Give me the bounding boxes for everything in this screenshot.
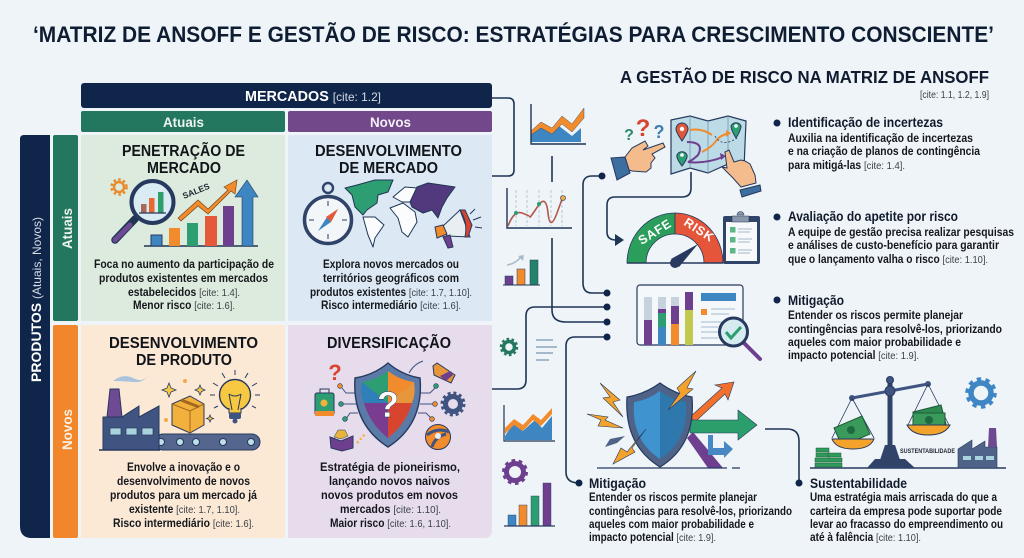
text: desenvolvimento de mercado description [310,259,472,312]
icon: purple gear [504,460,526,484]
connector lines [492,98,799,483]
item: sustentabilidade: carteira da empresa pode suportar pode [810,506,1002,518]
illustration: hands over map: ? [636,115,650,142]
illustration: balance scale [810,376,1006,468]
text: desenvolvimento de produto description: produtos para um mercado já [110,490,258,502]
panel: desenvolvimento de produto [81,325,285,538]
illustration: risk gauge and checklist: SAFE [636,216,674,248]
text: penetração de mercado description: Menor risco [cite: 1.6]. [133,300,235,312]
icon: area chart bottom [504,405,555,441]
text: penetração de mercado description: estabelecidos [cite: 1.4]. [128,287,240,299]
illustration: hands over map: ? [624,127,634,144]
panel: desenvolvimento de mercado [288,135,492,321]
text: desenvolvimento de mercado description: territórios geográficos com [323,273,459,285]
heading: desenvolvimento de produto [109,335,258,369]
icon: area chart top [531,104,586,144]
title: ‘MATRIZ DE ANSOFF E GESTÃO DE RISCO: ESTRATÉGIAS PARA CRESCIMENTO CONSCIENTE’ [33,22,994,47]
item: avaliação do apetite por risco: e análises de custo-benefício para garantir [788,240,999,252]
item: mitigação right: Entender os riscos permite planejar [788,310,963,322]
item: mitigação right [774,292,1002,362]
side header: novos row: Novos [59,409,75,450]
item: avaliação do apetite por risco: Avaliação do apetite por risco [788,208,958,224]
illustration: factory, box, lightbulb [99,370,260,450]
illustration: dashboard and magnifier [637,285,760,359]
item: mitigação right: contingências para resolvê-los, priorizando [788,324,1002,336]
text: desenvolvimento de produto description [110,462,258,530]
header: mercados [81,83,492,108]
header: atuais column [81,111,285,132]
icon: text lines [536,340,557,360]
heading: desenvolvimento de produto: DESENVOLVIMENTO [109,335,258,352]
item: mitigação right: impacto potencial [cite: 1.9]. [788,350,919,362]
panel: penetração de mercado [81,135,285,321]
item: mitigação bottom: contingências para resolvê-los, priorizando [589,506,792,518]
text: penetração de mercado description: produtos existentes em mercados [99,273,268,285]
item: identificação de incertezas: e na criação de planos de contingência [788,146,981,158]
illustration: magnifier and growth bars: SALES [181,181,211,201]
item: mitigação bottom: Mitigação [589,475,646,491]
text: desenvolvimento de mercado description: Explora novos mercados ou [323,259,459,271]
heading: desenvolvimento de mercado: DE MERCADO [339,160,438,177]
text: diversificação description: novos produtos em novos [321,490,458,502]
heading: desenvolvimento de mercado: DESENVOLVIMENTO [315,143,462,160]
illustration: shield with question mark: ? [377,384,399,425]
heading: gestão de risco: [cite: 1.1, 1.2, 1.9] [920,89,989,101]
header: atuais column: Atuais [163,114,204,130]
illustration: risk gauge and checklist [627,212,760,268]
illustration: risk gauge and checklist: RISK [681,215,717,245]
item: sustentabilidade: Sustentabilidade [810,475,907,491]
item: sustentabilidade [796,475,1003,544]
text: desenvolvimento de produto description: Risco intermediário [cite: 1.6]. [113,518,254,530]
header: novos column: Novos [370,114,411,130]
item: mitigação right: aqueles com maior probabilidade e [788,337,961,349]
panel: diversificação [288,325,492,538]
text: penetração de mercado description [94,259,274,312]
heading: penetração de mercado [122,142,245,177]
heading: gestão de risco [620,66,989,101]
illustration: hands over map [611,115,761,197]
icon: line chart [507,188,572,228]
heading: penetração de mercado: PENETRAÇÃO DE [122,142,245,160]
text: penetração de mercado description: Foca no aumento da participação de [94,259,274,271]
side header: novos row [53,325,78,538]
icon: green gear [501,339,517,355]
illustration: balance scale: SUSTENTABILIDADE [900,448,956,455]
side header: produtos [20,135,50,538]
item: identificação de incertezas: para mitigá-las [cite: 1.4]. [788,160,905,172]
header: mercados: MERCADOS [cite: 1.2] [245,89,381,105]
illustration: compass, world map, megaphone [304,180,482,248]
text: diversificação description: lançando novos naivos [329,476,450,488]
heading: penetração de mercado: MERCADO [147,160,221,177]
icon: small bar chart [503,255,540,285]
text: desenvolvimento de produto description: Envolve a inovação e o [127,462,240,474]
side header: produtos: PRODUTOS (Atuais, Novos) [28,217,44,382]
text: diversificação description: Estratégia de pioneirismo, [320,462,460,474]
heading: desenvolvimento de mercado [315,143,462,177]
side header: atuais row [53,135,78,321]
header: novos column [288,111,492,132]
text: diversificação description: mercados [cite: 1.10]. [340,504,441,516]
text: desenvolvimento de produto description: existente [cite: 1.7, 1.10]. [129,504,240,516]
heading: gestão de risco: A GESTÃO DE RISCO NA MATRIZ DE ANSOFF [620,66,989,87]
item: identificação de incertezas [774,114,981,172]
icon: bottom bar chart [504,483,555,526]
item: mitigação bottom: Entender os riscos permite planejar [589,492,757,504]
item: mitigação right: Mitigação [788,292,844,308]
heading: diversificação: DIVERSIFICAÇÃO [327,334,451,352]
illustration: shield with question mark [315,360,464,451]
item: sustentabilidade: Uma estratégia mais arriscada do que a [810,492,998,504]
illustration: hands over map: ? [654,122,664,142]
text: desenvolvimento de mercado description: produtos existentes [cite: 1.7, 1.10]. [310,287,472,299]
item: identificação de incertezas: Auxilia na identificação de incertezas [788,133,973,145]
item: mitigação bottom: aqueles com maior probabilidade e [589,519,754,531]
item: mitigação bottom: impacto potencial [cite: 1.9]. [589,532,716,544]
illustration: magnifier and growth bars [112,180,258,246]
text: diversificação description: Maior risco [cite: 1.6, 1.10]. [330,518,451,530]
heading: desenvolvimento de produto: DE PRODUTO [136,352,232,369]
text: diversificação description [320,462,460,530]
item: avaliação do apetite por risco: que o lançamento valha o risco [cite: 1.10]. [788,254,988,266]
side header: atuais row: Atuais [59,208,75,249]
text: desenvolvimento de mercado description: Risco intermediário [cite: 1.6]. [321,300,461,312]
text: desenvolvimento de produto description: desenvolvimento de novos [117,476,250,488]
item: mitigação bottom [576,475,792,544]
item: sustentabilidade: até à falência [cite: 1.10]. [810,532,921,544]
item: identificação de incertezas: Identificação de incertezas [788,114,943,130]
item: avaliação do apetite por risco [774,208,1014,266]
illustration: shield with question mark: ? [328,360,342,385]
illustration: shield with arrows [587,371,757,468]
